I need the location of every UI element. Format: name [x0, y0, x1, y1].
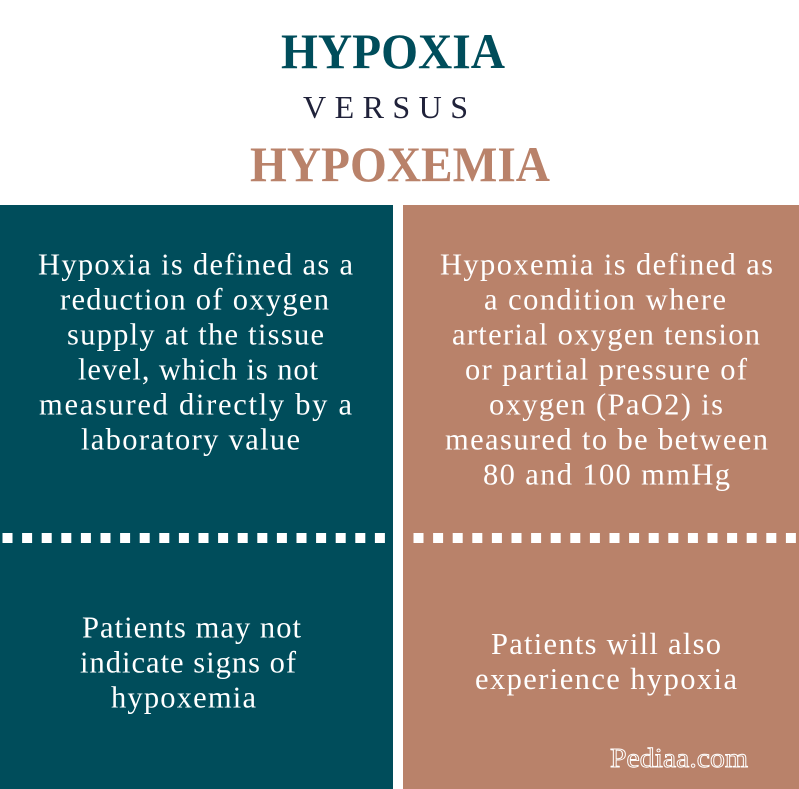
- text block: hypoxia definition: Hypoxia is defined as a: [38, 248, 353, 282]
- panel: hypoxemia column: [403, 205, 799, 789]
- text block: hypoxemia signs: [475, 627, 737, 696]
- text block: hypoxemia definition: or partial pressure of: [465, 352, 748, 386]
- title: Hypoxia: HYPOXIA: [281, 23, 505, 79]
- text block: hypoxia definition: laboratory value: [81, 422, 300, 456]
- divider: right dotted line: [414, 533, 796, 543]
- text block: hypoxia definition: supply at the tissue: [67, 318, 324, 352]
- divider: left dotted line: [2, 533, 385, 543]
- text block: hypoxemia signs: experience hypoxia: [475, 662, 737, 696]
- title: versus: VERSUS: [303, 89, 468, 125]
- text block: hypoxia definition: [38, 248, 353, 456]
- logo: Pediaa.com: Pediaa.com: [610, 743, 748, 773]
- text block: hypoxia signs: indicate signs of: [80, 646, 297, 680]
- text block: hypoxemia definition: [440, 248, 773, 492]
- text block: hypoxemia definition: Hypoxemia is defined as: [440, 248, 773, 282]
- text block: hypoxia definition: reduction of oxygen: [60, 282, 329, 316]
- text block: hypoxemia definition: oxygen (PaO2) is: [489, 388, 723, 422]
- text block: hypoxia signs: hypoxemia: [111, 680, 256, 714]
- text block: hypoxemia signs: Patients will also: [491, 627, 721, 661]
- text block: hypoxia signs: [80, 610, 302, 714]
- text block: hypoxemia definition: measured to be between: [445, 422, 768, 456]
- text block: hypoxia signs: Patients may not: [82, 610, 302, 644]
- text block: hypoxemia definition: 80 and 100 mmHg: [483, 458, 730, 492]
- text block: hypoxemia definition: arterial oxygen tension: [452, 318, 760, 352]
- text block: hypoxia definition: measured directly by a: [39, 388, 352, 422]
- panel: hypoxia column: [0, 205, 393, 789]
- text block: hypoxemia definition: a condition where: [484, 282, 726, 316]
- text block: hypoxia definition: level, which is not: [78, 352, 319, 386]
- title: Hypoxemia: HYPOXEMIA: [250, 136, 550, 192]
